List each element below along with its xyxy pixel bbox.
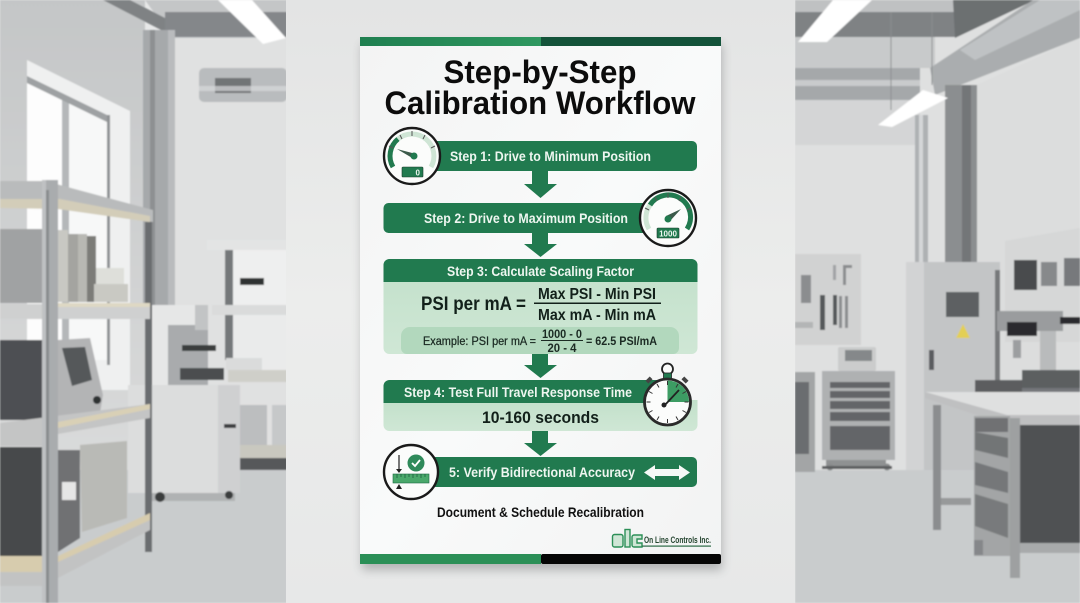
icon: ruler with check mark [384, 445, 438, 499]
step 3 header [384, 259, 698, 282]
background: right laboratory scene [795, 0, 1080, 603]
icon: minimum gauge: 0 [416, 168, 421, 178]
back furniture [207, 240, 287, 250]
logo: On Line Controls Inc.: On Line Controls Inc. [644, 535, 711, 546]
background: wall panel behind poster [286, 0, 795, 603]
arrow 1 [524, 171, 557, 198]
bottom colour bar [360, 554, 721, 564]
panel: step 4 response time [384, 380, 698, 431]
right pegboard and machine [1005, 228, 1080, 342]
formula: Max PSI - Min PSI [538, 286, 656, 303]
pegboard and tools [795, 254, 861, 345]
step 3 panel body [384, 259, 698, 354]
step 2: bar: Step 2: Drive to Maximum Position [424, 210, 628, 226]
worked example: Example: PSI per mA = [423, 336, 536, 348]
arrow 4 [524, 431, 557, 456]
worked example: 1000 - 0 [542, 329, 582, 341]
electrical cabinet [906, 262, 1000, 470]
arrow 2 [524, 233, 557, 257]
worked example: = 62.5 PSI/mA [586, 336, 657, 348]
metal shelf frame [145, 222, 152, 552]
step 4 header [384, 380, 660, 403]
title [384, 54, 696, 121]
icon: maximum gauge [640, 190, 696, 246]
items on the metal shelf [0, 229, 44, 303]
response time value: 10-160 seconds [482, 408, 599, 427]
workbench [925, 392, 1080, 415]
step 1: bar: Step 1: Drive to Minimum Position [450, 148, 651, 164]
formula [421, 286, 661, 324]
formula: Max mA - Min mA [538, 307, 656, 324]
step 4 header: Step 4: Test Full Travel Response Time [404, 384, 632, 400]
title: Step-by-Step [444, 54, 636, 90]
icon: maximum gauge: 1000 [659, 230, 677, 238]
step 4 panel body [384, 400, 698, 431]
formula: PSI per mA = [421, 294, 526, 315]
poster paper [360, 38, 721, 564]
poster shadow [362, 44, 722, 570]
drawer cabinet [795, 372, 815, 472]
step 1: bar [425, 141, 697, 171]
icon: minimum gauge [384, 128, 440, 184]
arrow 3 [524, 354, 557, 378]
icon: double-headed arrow [644, 465, 690, 480]
poster [360, 37, 721, 564]
background: left laboratory scene [0, 0, 287, 603]
step 2: bar [384, 203, 654, 233]
top colour bar [360, 37, 721, 46]
worked example [401, 327, 679, 355]
step 5: bar: 5: Verify Bidirectional Accuracy [449, 464, 635, 480]
logo mark [612, 530, 642, 547]
logo: On Line Controls Inc. [612, 530, 711, 547]
worked example: 20 - 4 [548, 343, 577, 355]
step 5: bar [420, 457, 697, 487]
closing step text: Document & Schedule Recalibration [437, 504, 644, 520]
step 3 header: Step 3: Calculate Scaling Factor [447, 263, 634, 279]
panel: step 3 scaling factor [384, 259, 698, 355]
title: Calibration Workflow [384, 85, 696, 121]
icon: stopwatch [644, 364, 690, 425]
